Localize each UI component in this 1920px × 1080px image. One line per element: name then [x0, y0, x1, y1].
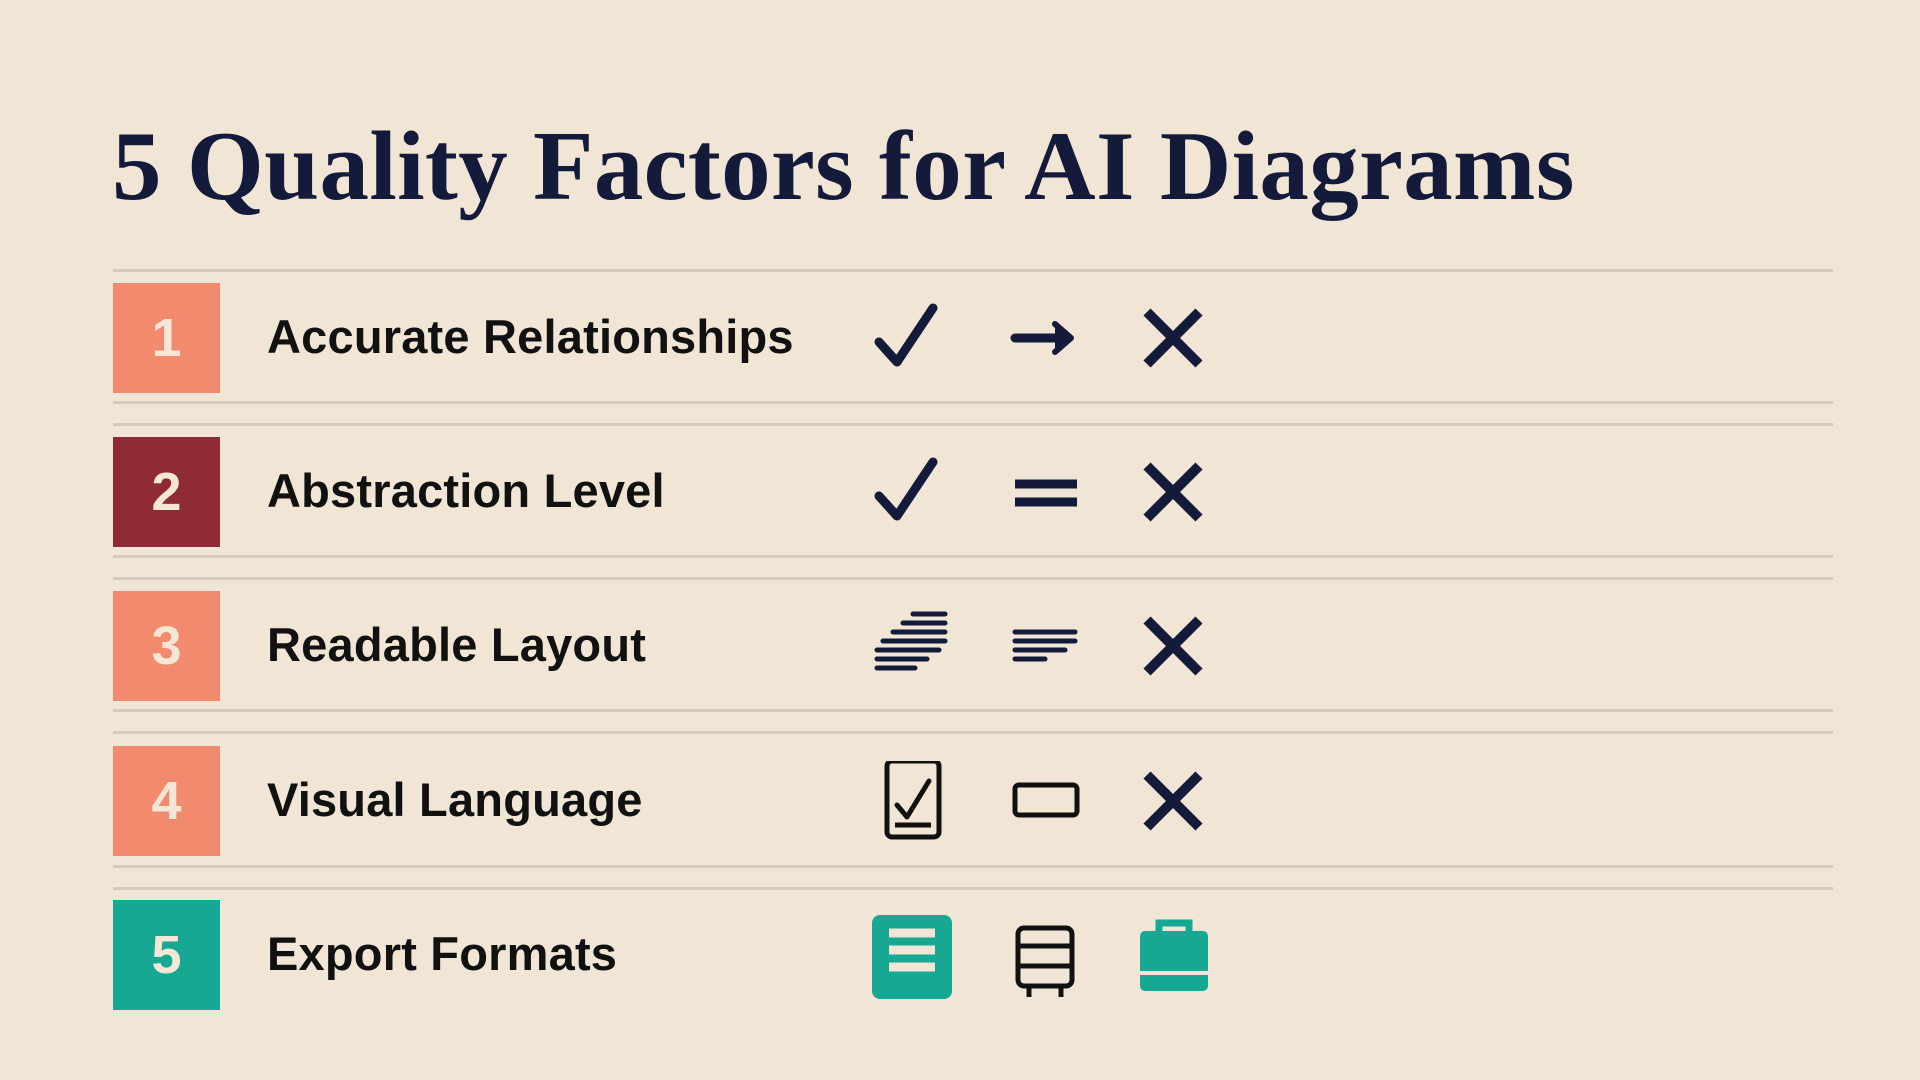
row 5: export formats: [113, 900, 1208, 1010]
icons: document, cart, bag: [872, 915, 1208, 999]
number badge 2: 2: [151, 462, 182, 522]
row 2: abstraction level: [113, 437, 1202, 547]
label: Readable Layout: [267, 618, 646, 671]
label: Accurate Relationships: [267, 310, 794, 363]
number badge 5: 5: [151, 925, 182, 985]
icons: check, equals, cross: [874, 458, 1202, 522]
number badge 1: [113, 283, 220, 393]
row 4: visual language: [113, 746, 1202, 856]
icons: text lines, short lines, cross: [874, 612, 1202, 676]
number badge 4: 4: [151, 771, 182, 831]
icons: check, arrow, cross: [874, 304, 1202, 368]
number badge 4: [113, 746, 220, 856]
label: Abstraction Level: [267, 464, 665, 517]
icons: checked card, rectangle, cross: [884, 761, 1202, 840]
number badge 3: 3: [151, 616, 182, 676]
number badge 1: 1: [151, 308, 182, 368]
number badge 3: [113, 591, 220, 701]
number badge 2: [113, 437, 220, 547]
label: Visual Language: [267, 773, 643, 826]
label: Export Formats: [267, 927, 617, 980]
row 1: accurate relationships: [113, 283, 1202, 393]
number badge 5: [113, 900, 220, 1010]
row 3: readable layout: [113, 591, 1202, 701]
title: 5 Quality Factors for AI Diagrams: [112, 112, 1575, 221]
